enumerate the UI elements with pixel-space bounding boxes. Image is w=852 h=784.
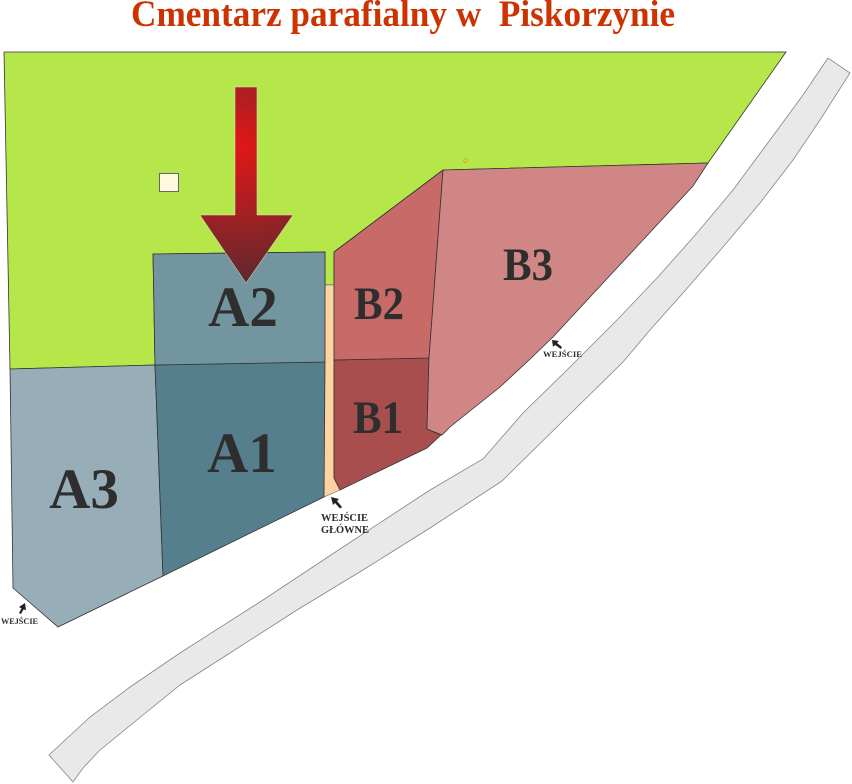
entrance path [324, 285, 340, 497]
west entrance label [1, 603, 38, 626]
main entrance label [321, 497, 369, 536]
sector A1 [155, 362, 325, 576]
green area [4, 52, 786, 369]
icon: arrow to main entrance [331, 497, 342, 508]
main entrance label: WEJŚCIE [321, 512, 368, 524]
sector A3: A3 [49, 458, 119, 521]
small yellow dot [464, 159, 467, 162]
west entrance label: WEJŚCIE [1, 616, 38, 626]
sector B2: B2 [354, 278, 404, 330]
sector A2: A2 [208, 276, 278, 339]
sector B1 [334, 358, 441, 490]
B3 entrance label: WEJŚCIE [543, 349, 582, 359]
sector A1: A1 [207, 422, 277, 485]
sector B3: B3 [503, 239, 553, 291]
icon: arrow to B3 entrance [552, 340, 562, 349]
sector B2 [334, 170, 443, 360]
sector B3 [427, 163, 708, 435]
sector A3 [10, 365, 163, 627]
small square marker [160, 174, 178, 192]
icon: arrow to west entrance [19, 603, 26, 614]
sector B1: B1 [353, 392, 403, 444]
sector A2 [153, 252, 325, 365]
main entrance label: GŁÓWNE [321, 524, 369, 536]
B3 entrance label [543, 340, 582, 359]
red arrow [200, 87, 293, 283]
